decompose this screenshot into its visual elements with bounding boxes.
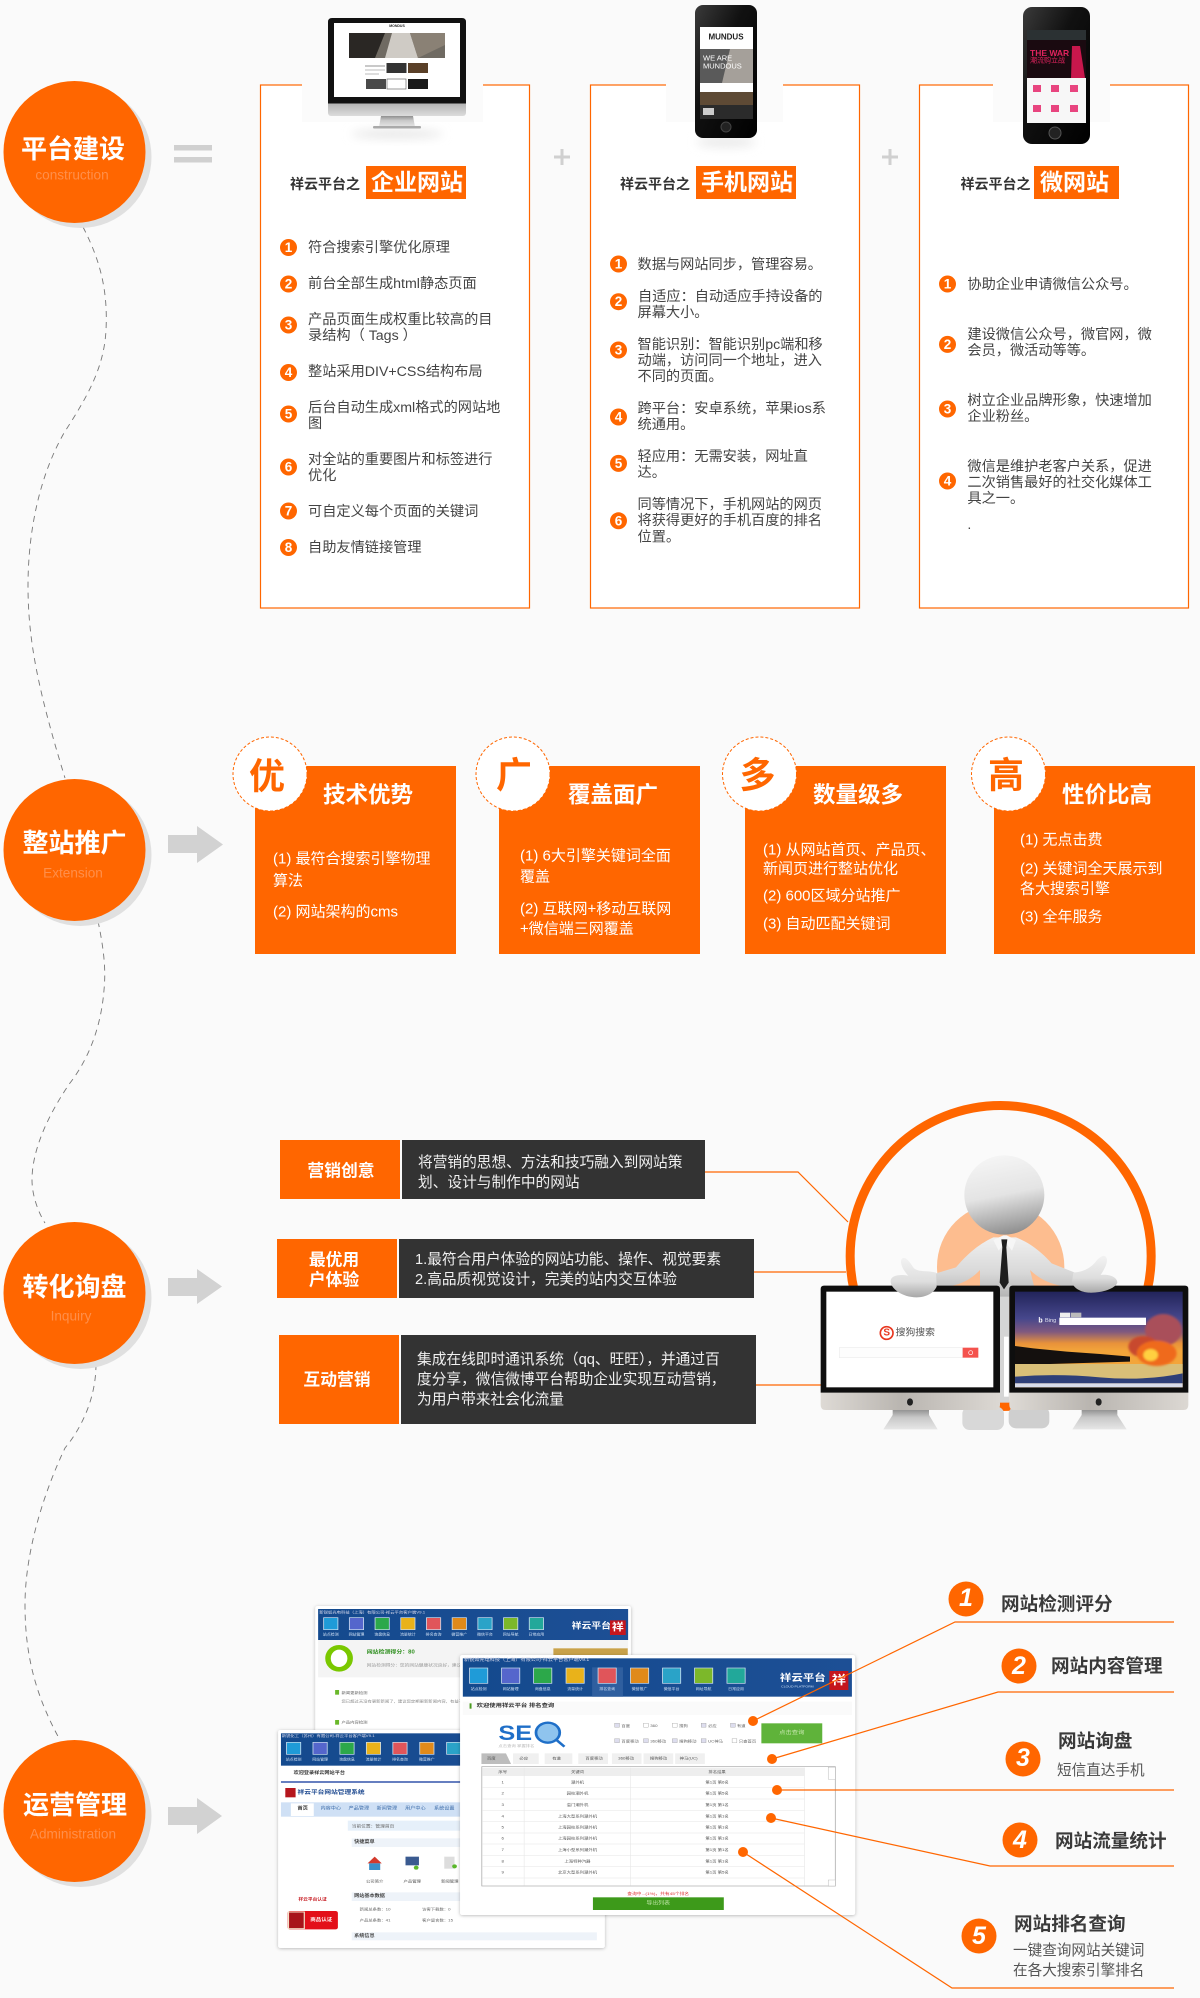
list: 企业网站 features: 整站采用DIV+CSS结构布局 bbox=[308, 364, 483, 380]
list: 微网站 features: 企业粉丝。 bbox=[967, 408, 1038, 425]
illustration: figure with two monitors bbox=[821, 1105, 1188, 1430]
card: 技术优势: 算法 bbox=[273, 872, 303, 890]
list: 微网站 features: 树立企业品牌形象，快速增加 bbox=[967, 392, 1152, 409]
card: 技术优势: 技术优势 bbox=[323, 782, 413, 808]
callout 3: 网站询盘 bbox=[1006, 1730, 1145, 1779]
window: site admin: 访客下载数：0 bbox=[422, 1906, 451, 1912]
orange ring bbox=[850, 1105, 1151, 1406]
window: site score: 祥云平台 bbox=[572, 1621, 611, 1631]
peach disc bbox=[937, 1203, 1064, 1330]
card: 技术优势: 优 bbox=[249, 756, 285, 796]
card: 数量级多: (3) 自动匹配关键词 bbox=[763, 916, 891, 932]
window: site admin: 网站基本数据 bbox=[354, 1893, 385, 1899]
window: rank query: UC神马 bbox=[708, 1738, 723, 1743]
window: rank query: 百度 bbox=[487, 1755, 496, 1761]
list: 微网站 features: 1 bbox=[944, 276, 952, 292]
window: site admin: 用户中心 bbox=[405, 1805, 426, 1811]
window: site score: 网站检测得分：80 bbox=[367, 1648, 415, 1655]
window: site admin: 祥云平台网站管理系统 bbox=[298, 1789, 365, 1796]
window: rank query: 新锐如光电科技（上海）有限公司-祥云平台客户端V9.1 bbox=[464, 1657, 590, 1663]
window: site admin: 产品管理 bbox=[404, 1878, 421, 1883]
icon: desktop monitor: MONDUS bbox=[389, 24, 405, 28]
window: rank query: 搜狗移动 bbox=[650, 1755, 667, 1761]
monitor: Bing search bbox=[1009, 1286, 1188, 1429]
window: site score bbox=[315, 1606, 631, 1739]
window: site score: 日常应用 bbox=[529, 1632, 545, 1636]
callout 5: 网站排名查询 bbox=[962, 1914, 1144, 1979]
window: rank query: 3 bbox=[502, 1802, 505, 1807]
window: site score: 新闻更新检测 bbox=[341, 1689, 368, 1695]
card: 覆盖面广: +微信端三网覆盖 bbox=[520, 920, 634, 938]
row: 营销创意: 划、设计与制作中的网站 bbox=[418, 1174, 580, 1191]
callout 4: 网站流量统计 bbox=[1002, 1822, 1167, 1858]
plus sign 1 bbox=[554, 149, 570, 165]
card: 性价比高 bbox=[972, 737, 1195, 954]
window: site admin: 商品认证 bbox=[310, 1916, 332, 1923]
window: rank query: 询盘信息 bbox=[535, 1687, 551, 1691]
list: 微网站 features: 建设微信公众号，微官网，微 bbox=[967, 327, 1152, 343]
window: rank query: 点击查询 bbox=[779, 1729, 805, 1736]
card: 覆盖面广: 覆盖面广 bbox=[568, 782, 658, 808]
list: 微网站 features: 2 bbox=[944, 337, 951, 352]
connector lines: rows to figure bbox=[705, 1172, 848, 1385]
window: rank query: 第1页 第1名 bbox=[705, 1835, 729, 1841]
list: 手机网站 features: 1 bbox=[615, 256, 623, 272]
callout 2: 网站内容管理: 2 bbox=[1011, 1652, 1026, 1680]
icon: phone MUNDUS bbox=[695, 5, 757, 147]
window: rank query: 北京大型系列潮外机 bbox=[558, 1869, 597, 1875]
list: 企业网站 features: 对全站的重要图片和标签进行 bbox=[308, 451, 492, 468]
section badge: 整站推广: Extension bbox=[43, 866, 103, 880]
list: 手机网站 features: 达。 bbox=[638, 465, 666, 481]
window: rank query: 排名结果 bbox=[708, 1768, 726, 1774]
software screenshots bbox=[278, 1606, 855, 1948]
list: 企业网站 features: 4 bbox=[285, 365, 293, 380]
list: 手机网站 features: 2 bbox=[615, 294, 622, 309]
heading: 微网站: 祥云平台之 bbox=[960, 176, 1030, 192]
list: 企业网站 features: 符合搜索引擎优化原理 bbox=[308, 239, 450, 256]
window: rank query: 6 bbox=[502, 1836, 505, 1841]
callout 2: 网站内容管理 bbox=[1002, 1648, 1163, 1684]
row: 营销创意 bbox=[280, 1140, 705, 1199]
equals sign bbox=[174, 145, 212, 162]
list: 微网站 features: 二次销售最好的社交化媒体工 bbox=[967, 474, 1152, 491]
callout 5: 网站排名查询: 一键查询网站关键词 bbox=[1013, 1942, 1144, 1959]
callout 5: 网站排名查询: 网站排名查询 bbox=[1014, 1914, 1126, 1934]
window: rank query: 排名查询 bbox=[599, 1687, 615, 1691]
window: site score: 您已超过天没有更新新闻了，建议您定期更新新闻内容，有益于网站 bbox=[341, 1698, 472, 1703]
heading: 企业网站: 祥云平台之 bbox=[290, 176, 360, 192]
card: 性价比高: (3) 全年服务 bbox=[1020, 908, 1103, 926]
list: 企业网站 features: 3 bbox=[285, 318, 293, 332]
list: 企业网站 features: 图 bbox=[308, 416, 322, 432]
list: 企业网站 features: 1 bbox=[285, 240, 293, 255]
window: rank query: 微信平台 bbox=[664, 1687, 680, 1691]
window: rank query: 流量统计 bbox=[567, 1687, 583, 1691]
list: 手机网站 features: 自适应：自动适应手持设备的 bbox=[638, 288, 822, 305]
heading: 企业网站 bbox=[290, 166, 466, 199]
window: rank query: 必应 bbox=[519, 1755, 528, 1761]
section badge: 整站推广 bbox=[4, 779, 152, 926]
window: rank query: 有道 bbox=[737, 1722, 746, 1728]
list: 微网站 features: 4 bbox=[944, 474, 952, 488]
list: 企业网站 features: 后台自动生成xml格式的网站地 bbox=[308, 400, 500, 416]
window: rank query: 搜狗移动 bbox=[679, 1738, 697, 1743]
list: 手机网站 features: 动端，访问同一个地址，进入 bbox=[638, 353, 822, 369]
card: 覆盖面广: (1) 6大引擎关键词全面 bbox=[520, 846, 671, 864]
list: 企业网站 features: 前台全部生成html静态页面 bbox=[308, 275, 477, 292]
window: site score: 微营推广 bbox=[451, 1632, 468, 1636]
icon: desktop monitor bbox=[328, 18, 466, 138]
window: rank query: 第1页 第1名 bbox=[705, 1846, 729, 1852]
window: site admin: 产品总条数：41 bbox=[360, 1917, 391, 1922]
monitor: Sogou search: S bbox=[883, 1327, 890, 1338]
window: rank query: 百度 bbox=[621, 1722, 630, 1728]
card: 数量级多: 数量级多 bbox=[813, 782, 903, 808]
heading: 手机网站: 祥云平台之 bbox=[620, 176, 690, 192]
window: site admin: 公司简介 bbox=[366, 1878, 383, 1883]
callout 5: 网站排名查询: 在各大搜索引擎排名 bbox=[1013, 1962, 1144, 1979]
card: 覆盖面广: (2) 互联网+移动互联网 bbox=[520, 900, 671, 918]
figure hands bbox=[891, 1256, 1117, 1297]
window: rank query: 1 bbox=[502, 1780, 505, 1784]
window: rank query: 上海园柱系列潮外机 bbox=[558, 1835, 597, 1841]
row: 互动营销: 为用户带来社会化流量 bbox=[417, 1391, 564, 1408]
card: 数量级多: 多 bbox=[739, 754, 776, 796]
list: 手机网站 features: 屏幕大小。 bbox=[638, 305, 708, 321]
callout 2: 网站内容管理: 网站内容管理 bbox=[1051, 1656, 1163, 1676]
icon: phone MUNDUS: WE ARE bbox=[703, 54, 732, 62]
monitor: Bing search: b bbox=[1038, 1317, 1043, 1324]
window: site admin: 询盘信息 bbox=[339, 1757, 355, 1761]
card: 数量级多: (1) 从网站首页、产品页、 bbox=[763, 842, 936, 858]
list: 微网站 features: 微信是维护老客户关系，促进 bbox=[967, 458, 1152, 475]
arrow: section 3 bbox=[168, 1269, 222, 1304]
window: rank query: 欢迎使用祥云平台 排名查询 bbox=[477, 1701, 554, 1709]
row: 互动营销: 度分享，微信微博平台帮助企业实现互动营销， bbox=[417, 1370, 725, 1388]
window: rank query: 百度移动 bbox=[621, 1738, 639, 1743]
window: site admin: 祥云平台认证 bbox=[298, 1896, 327, 1903]
window: site admin bbox=[278, 1730, 605, 1948]
panel: 企业网站 bbox=[260, 18, 530, 608]
icon: phone MUNDUS: MUNDOUS bbox=[703, 62, 742, 70]
window: rank query: 上海大型系列潮外机 bbox=[558, 1813, 597, 1818]
window: rank query bbox=[460, 1655, 855, 1915]
window: rank query: 第1页 第5名 bbox=[705, 1790, 729, 1796]
window: rank query: 9 bbox=[502, 1870, 505, 1875]
window: site admin: 当前位置：管理首页 bbox=[352, 1823, 395, 1829]
section badge: 转化询盘: Inquiry bbox=[51, 1308, 92, 1324]
window: rank query: 祥 bbox=[832, 1672, 846, 1687]
window: rank query: 360 bbox=[650, 1723, 658, 1728]
icon: phone MUNDUS: MUNDUS bbox=[708, 32, 744, 42]
list: 企业网站 features: 7 bbox=[285, 504, 292, 518]
window: site score: 网站检测得分：您的网站健康状况良好，建议您继续保持 bbox=[367, 1662, 486, 1668]
list: 手机网站 features: 4 bbox=[615, 410, 623, 424]
window: rank query: 网站管理 bbox=[503, 1687, 519, 1691]
monitor: Bing search: Bing bbox=[1045, 1318, 1056, 1324]
section badge: 运营管理: 运营管理 bbox=[23, 1790, 127, 1820]
list: 微网站 features: 协助企业申请微信公众号。 bbox=[967, 276, 1138, 293]
list: 微网站 features: 会员，微活动等等。 bbox=[967, 342, 1095, 359]
row: 最优用户体验: 1.最符合用户体验的网站功能、操作、视觉要素 bbox=[415, 1251, 721, 1268]
window: rank query: 关键词 bbox=[571, 1768, 584, 1774]
callout 1: 网站检测评分: 网站检测评分 bbox=[1001, 1594, 1113, 1614]
window: site score: 产品内容检测 bbox=[341, 1719, 368, 1725]
row: 最优用户体验 bbox=[277, 1239, 754, 1298]
window: rank query: 第1页 第5名 bbox=[705, 1869, 729, 1875]
arrow: section 2 bbox=[168, 826, 223, 863]
window: rank query: 5 bbox=[502, 1825, 505, 1830]
window: rank query: 上海小型系列潮外机 bbox=[558, 1846, 597, 1852]
card: 技术优势: (2) 网站架构的cms bbox=[273, 904, 398, 920]
window: site admin: 快捷菜单 bbox=[354, 1839, 375, 1845]
list: 企业网站 features: 2 bbox=[285, 276, 292, 292]
callout 3: 网站询盘: 网站询盘 bbox=[1058, 1730, 1132, 1752]
section badge: 转化询盘 bbox=[4, 1222, 152, 1369]
list: 手机网站 features: 位置。 bbox=[638, 530, 680, 546]
window: rank query: 7 bbox=[502, 1847, 505, 1852]
section badge: 转化询盘: 转化询盘 bbox=[22, 1272, 127, 1302]
list: 企业网站 features: 6 bbox=[285, 460, 293, 474]
window: rank query: 只查首页 bbox=[739, 1738, 756, 1743]
card: 性价比高: (1) 无点击费 bbox=[1020, 832, 1103, 848]
icon: phone WeChat site bbox=[1023, 7, 1090, 144]
card: 数量级多 bbox=[722, 737, 946, 954]
icon: phone WeChat site: THE WAR bbox=[1030, 48, 1069, 58]
window: site score: 询盘信息 bbox=[374, 1632, 390, 1636]
list: 手机网站 features bbox=[610, 256, 826, 546]
window: site score: 排名查询 bbox=[426, 1632, 442, 1636]
list: 企业网站 features: 8 bbox=[285, 540, 293, 555]
window: site admin: 产品管理 bbox=[349, 1805, 369, 1811]
window: rank query: 360移动 bbox=[650, 1738, 666, 1743]
list: 手机网站 features: 6 bbox=[615, 513, 623, 528]
list: 企业网站 features: 录结构（ Tags ） bbox=[308, 328, 417, 344]
list: 企业网站 features: 5 bbox=[285, 406, 293, 422]
callout 1: 网站检测评分: 1 bbox=[959, 1584, 973, 1612]
row: 营销创意: 将营销的思想、方法和技巧融入到网站策 bbox=[418, 1154, 683, 1171]
list: 手机网站 features: 同等情况下，手机网站的网页 bbox=[638, 496, 822, 513]
window: site score: 祥 bbox=[612, 1620, 624, 1633]
window: rank query: 祥云平台 bbox=[780, 1672, 826, 1684]
window: rank query: 潮外机 bbox=[571, 1779, 584, 1784]
icon: phone WeChat site: 潮流购立战 bbox=[1030, 56, 1065, 64]
window: rank query: 第1页 第1名 bbox=[705, 1824, 729, 1830]
window: rank query: 日常应用 bbox=[728, 1687, 744, 1691]
window: site admin: 站点检测 bbox=[286, 1757, 302, 1761]
row: 互动营销: 集成在线即时通讯系统（qq、旺旺），并通过百 bbox=[417, 1351, 720, 1368]
window: site admin: 流量统计 bbox=[366, 1757, 382, 1761]
window: rank query: 4 bbox=[502, 1814, 505, 1818]
callout 3: 网站询盘: 3 bbox=[1016, 1744, 1030, 1772]
heading: 手机网站: 手机网站 bbox=[701, 169, 793, 195]
window: site score: 站点检测 bbox=[323, 1632, 339, 1636]
plus sign 2 bbox=[882, 149, 898, 165]
window: rank query: 导出列表 bbox=[646, 1899, 671, 1906]
card: 性价比高: (2) 关键词全天展示到 bbox=[1020, 860, 1163, 878]
window: site admin: 客户留言数：15 bbox=[422, 1917, 454, 1922]
window: site admin: 新锐化工（苏州）有限公司-祥云平台客户端V9.1 bbox=[282, 1732, 375, 1738]
window: rank query: 第1页 第6名 bbox=[705, 1779, 729, 1784]
row: 营销创意: 营销创意 bbox=[307, 1160, 375, 1180]
list: 微网站 features bbox=[939, 276, 1152, 533]
list: 微网站 features: . bbox=[967, 517, 971, 533]
card: 数量级多: (2) 600区域分站推广 bbox=[763, 888, 901, 904]
window: rank query: 第1页 第1名 bbox=[705, 1858, 729, 1863]
callout 5: 网站排名查询: 5 bbox=[972, 1922, 987, 1950]
window: rank query: 百度移动 bbox=[585, 1755, 603, 1761]
window: rank query: 序号 bbox=[498, 1768, 507, 1774]
figure body bbox=[934, 1155, 1075, 1430]
heading: 微网站 bbox=[960, 166, 1119, 199]
list: 企业网站 features: 可自定义每个页面的关键词 bbox=[308, 504, 478, 520]
window: rank query: CLOUD PLATFORM bbox=[781, 1685, 814, 1688]
window: site admin: 新闻管理 bbox=[377, 1805, 397, 1811]
window: site admin: 系统信息 bbox=[354, 1932, 375, 1939]
list: 手机网站 features: 统通用。 bbox=[638, 417, 694, 433]
card: 性价比高: 各大搜索引擎 bbox=[1020, 880, 1110, 898]
row: 最优用户体验: 户体验 bbox=[309, 1270, 359, 1290]
window: rank query: 查询中...(1%)，共有45个排名 bbox=[627, 1890, 689, 1897]
dashed connector path bbox=[25, 227, 106, 1740]
window: site score: 微信平台 bbox=[477, 1632, 493, 1636]
window: rank query: 360移动 bbox=[618, 1755, 634, 1761]
list: 手机网站 features: 不同的页面。 bbox=[638, 369, 723, 385]
window: site score: 新锐如光电科技（上海）有限公司-祥云平台客户端V9.1 bbox=[319, 1609, 426, 1614]
monitor: Sogou search: 搜狗搜索 bbox=[896, 1325, 935, 1338]
window: rank query: 第1页 第1名 bbox=[705, 1801, 729, 1807]
window: rank query: 站点检测 bbox=[471, 1687, 487, 1691]
window: site admin: 排名查询 bbox=[392, 1757, 408, 1761]
window: rank query: SE bbox=[498, 1721, 532, 1745]
window: site admin: 新闻管理 bbox=[441, 1878, 458, 1883]
card: 技术优势: (1) 最符合搜索引擎物理 bbox=[273, 850, 431, 868]
window: rank query: 溢门潮外机 bbox=[567, 1801, 588, 1807]
list: 手机网站 features: 跨平台：安卓系统，苹果ios系 bbox=[638, 401, 826, 417]
window: rank query: 神马(UC) bbox=[680, 1755, 698, 1761]
window: rank query: 有道 bbox=[552, 1755, 561, 1761]
list: 手机网站 features: 智能识别：智能识别pc端和移 bbox=[638, 337, 823, 353]
card: 覆盖面广: 广 bbox=[496, 754, 532, 796]
section badge: 平台建设: construction bbox=[35, 168, 109, 182]
window: rank query: 2 bbox=[502, 1791, 505, 1796]
window: site admin: 网站管理 bbox=[312, 1757, 328, 1761]
window: site score: 网站管理 bbox=[349, 1632, 365, 1636]
callout 4: 网站流量统计: 4 bbox=[1012, 1826, 1027, 1854]
window: site admin: 首页 bbox=[298, 1805, 308, 1811]
window: rank query: 必应 bbox=[708, 1722, 717, 1728]
list: 手机网站 features: 轻应用：无需安装，网址直 bbox=[638, 448, 808, 465]
callout 3: 网站询盘: 短信直达手机 bbox=[1057, 1762, 1145, 1779]
card: 覆盖面广: 覆盖 bbox=[520, 868, 550, 886]
callout lines and dots bbox=[738, 1622, 1174, 1988]
window: site score: 网址导航 bbox=[503, 1632, 519, 1636]
list: 手机网站 features: 3 bbox=[615, 342, 623, 358]
card: 覆盖面广 bbox=[476, 737, 700, 954]
heading: 微网站: 微网站 bbox=[1040, 169, 1109, 195]
panel: 手机网站 bbox=[590, 5, 860, 608]
list: 企业网站 features: 自助友情链接管理 bbox=[308, 539, 422, 556]
list: 手机网站 features: 5 bbox=[615, 456, 623, 471]
window: site score: 流量统计 bbox=[400, 1632, 416, 1636]
list: 手机网站 features: 将获得更好的手机百度的排名 bbox=[638, 512, 822, 529]
list: 企业网站 features bbox=[280, 239, 500, 556]
row: 最优用户体验: 2.高品质视觉设计，完美的站内交互体验 bbox=[415, 1270, 677, 1288]
callout 4: 网站流量统计: 网站流量统计 bbox=[1055, 1830, 1167, 1852]
card: 性价比高: 性价比高 bbox=[1062, 782, 1152, 808]
section badge: 平台建设: 平台建设 bbox=[21, 134, 125, 164]
window: rank query: 上海园柱系列潮外机 bbox=[558, 1824, 597, 1830]
card: 数量级多: 新闻页进行整站优化 bbox=[763, 860, 898, 878]
window: rank query: 8 bbox=[502, 1859, 505, 1863]
monitor: Sogou search bbox=[821, 1286, 1000, 1429]
list: 手机网站 features: 数据与网站同步，管理容易。 bbox=[638, 256, 822, 273]
window: rank query: 微营推广 bbox=[632, 1687, 648, 1691]
row: 互动营销 bbox=[279, 1335, 756, 1424]
arrow: section 4 bbox=[168, 1798, 222, 1834]
window: site admin: 系统设置 bbox=[434, 1805, 455, 1811]
list: 微网站 features: 3 bbox=[944, 402, 952, 416]
window: site admin: 内容中心 bbox=[320, 1805, 341, 1811]
window: rank query: 园柱潮外机 bbox=[567, 1790, 588, 1796]
list: 微网站 features: 具之一。 bbox=[967, 491, 1024, 507]
window: site admin: 新闻总条数：10 bbox=[360, 1906, 391, 1912]
card: 性价比高: 高 bbox=[988, 754, 1024, 796]
panel: 微网站 bbox=[920, 7, 1188, 608]
section badge: 运营管理 bbox=[4, 1740, 152, 1887]
section badge: 平台建设 bbox=[4, 81, 152, 228]
list: 企业网站 features: 产品页面生成权重比较高的目 bbox=[308, 311, 492, 328]
window: rank query: 上海特种汽器 bbox=[564, 1858, 591, 1863]
heading: 企业网站: 企业网站 bbox=[371, 169, 463, 195]
card: 技术优势 bbox=[233, 737, 456, 954]
list: 企业网站 features: 优化 bbox=[308, 468, 336, 484]
window: rank query: 网址导航 bbox=[696, 1687, 712, 1691]
window: rank query: 第1页 第1名 bbox=[705, 1813, 729, 1818]
window: site admin: 微营推广 bbox=[419, 1757, 435, 1761]
heading: 手机网站 bbox=[620, 166, 796, 199]
row: 最优用户体验: 最优用 bbox=[309, 1250, 359, 1270]
callout 1: 网站检测评分 bbox=[948, 1582, 1113, 1616]
window: rank query: 点击查询 掌握排名 bbox=[498, 1742, 534, 1748]
window: rank query: 搜狗 bbox=[679, 1722, 688, 1728]
section badge: 运营管理: Administration bbox=[30, 1826, 116, 1842]
row: 互动营销: 互动营销 bbox=[303, 1370, 371, 1390]
window: site admin: 欢迎登录祥云网站平台 bbox=[294, 1769, 345, 1776]
section badge: 整站推广: 整站推广 bbox=[22, 828, 127, 858]
